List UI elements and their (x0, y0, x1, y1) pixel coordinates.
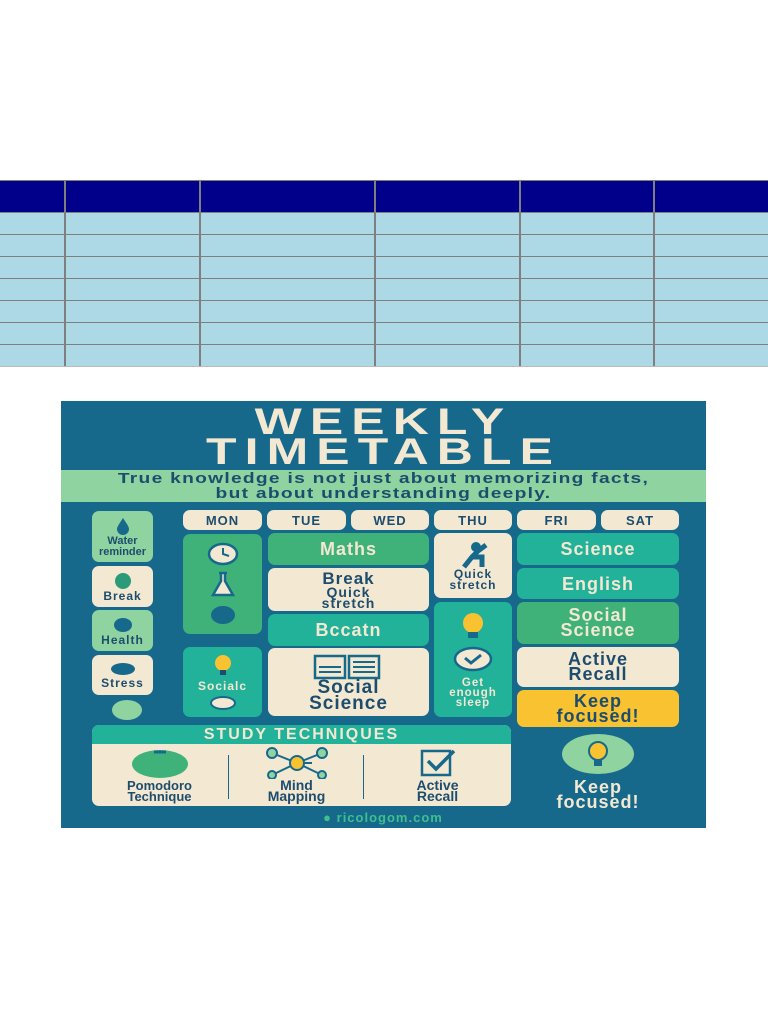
pomodoro (127, 750, 192, 804)
Science (517, 533, 679, 565)
left column: water reminder (92, 511, 153, 562)
text: SAT (626, 512, 654, 528)
Break quick stretch: Quick (327, 584, 370, 600)
keep focused bulb: Keep (574, 777, 622, 797)
top table (0, 180, 768, 366)
active recall (416, 750, 459, 804)
title: TIMETABLE (206, 431, 561, 472)
quote band (61, 470, 706, 502)
Break quick stretch: Break (322, 569, 375, 588)
Maths: Maths (320, 539, 377, 559)
Active Recall: Active (568, 649, 628, 669)
Active Recall: Recall (568, 664, 628, 684)
study techniques header: STUDY TECHNIQUES (204, 726, 399, 743)
THU teal (434, 602, 512, 717)
day headers: MON (206, 512, 239, 528)
left column: water reminder: Water (107, 534, 138, 546)
MON icons panel (183, 534, 262, 634)
active recall: Active (416, 777, 459, 793)
English (517, 568, 679, 599)
mind mapping: Mind (280, 777, 313, 793)
left: stress (92, 655, 153, 695)
study techniques panel (92, 725, 511, 806)
day headers (183, 510, 262, 530)
pomodoro: Technique (127, 789, 192, 804)
text: FRI (545, 512, 568, 528)
THU quick stretch: Quick (454, 566, 492, 580)
infographic (61, 401, 706, 828)
Social Science cream: Science (309, 693, 388, 714)
left: stress: Stress (101, 676, 144, 690)
THU teal: Get (462, 677, 484, 689)
Keep focused yellow (517, 690, 679, 727)
text: TUE (292, 512, 321, 528)
THU teal: enough (449, 687, 497, 699)
left: break: Break (103, 588, 142, 602)
Social Science green: Science (560, 620, 636, 640)
THU teal: sleep (456, 697, 490, 709)
text: WED (373, 512, 407, 528)
pomodoro: Pomodoro (127, 778, 192, 793)
title (206, 401, 561, 472)
text: THU (458, 512, 488, 528)
Active Recall (517, 647, 679, 687)
THU quick stretch: stretch (449, 578, 496, 592)
keep focused bulb (556, 734, 640, 812)
study techniques header (92, 725, 511, 744)
Science: Science (560, 539, 636, 559)
quote band: True knowledge is not just about memorizing facts, (118, 470, 649, 487)
mind mapping (266, 747, 328, 804)
active recall: Recall (417, 788, 458, 804)
Social Science cream (268, 648, 429, 716)
Keep focused yellow: focused! (556, 706, 640, 726)
left column: water reminder: reminder (99, 546, 146, 558)
left: health: Health (101, 632, 144, 646)
left: small icon (112, 700, 142, 720)
Social Science cream: Social (318, 677, 379, 698)
mind mapping: Mapping (268, 788, 325, 804)
Social Science green (517, 602, 679, 644)
left: health (92, 610, 153, 651)
English: English (562, 574, 634, 594)
footer url: ● ricologom.com (323, 810, 443, 825)
MON social (183, 647, 262, 717)
Bccatn (268, 614, 429, 646)
Maths (268, 533, 429, 565)
title: WEEKLY (255, 401, 512, 442)
Social Science green: Social (568, 605, 628, 625)
Keep focused yellow: Keep (574, 690, 622, 710)
MON social: Socialc (198, 679, 247, 693)
THU quick stretch (434, 533, 512, 598)
Bccatn: Bccatn (315, 620, 382, 640)
keep focused bulb: focused! (556, 792, 640, 812)
quote band: but about understanding deeply. (216, 485, 551, 502)
Break quick stretch: stretch (322, 595, 375, 611)
Break quick stretch (268, 568, 429, 611)
left: break (92, 566, 153, 607)
